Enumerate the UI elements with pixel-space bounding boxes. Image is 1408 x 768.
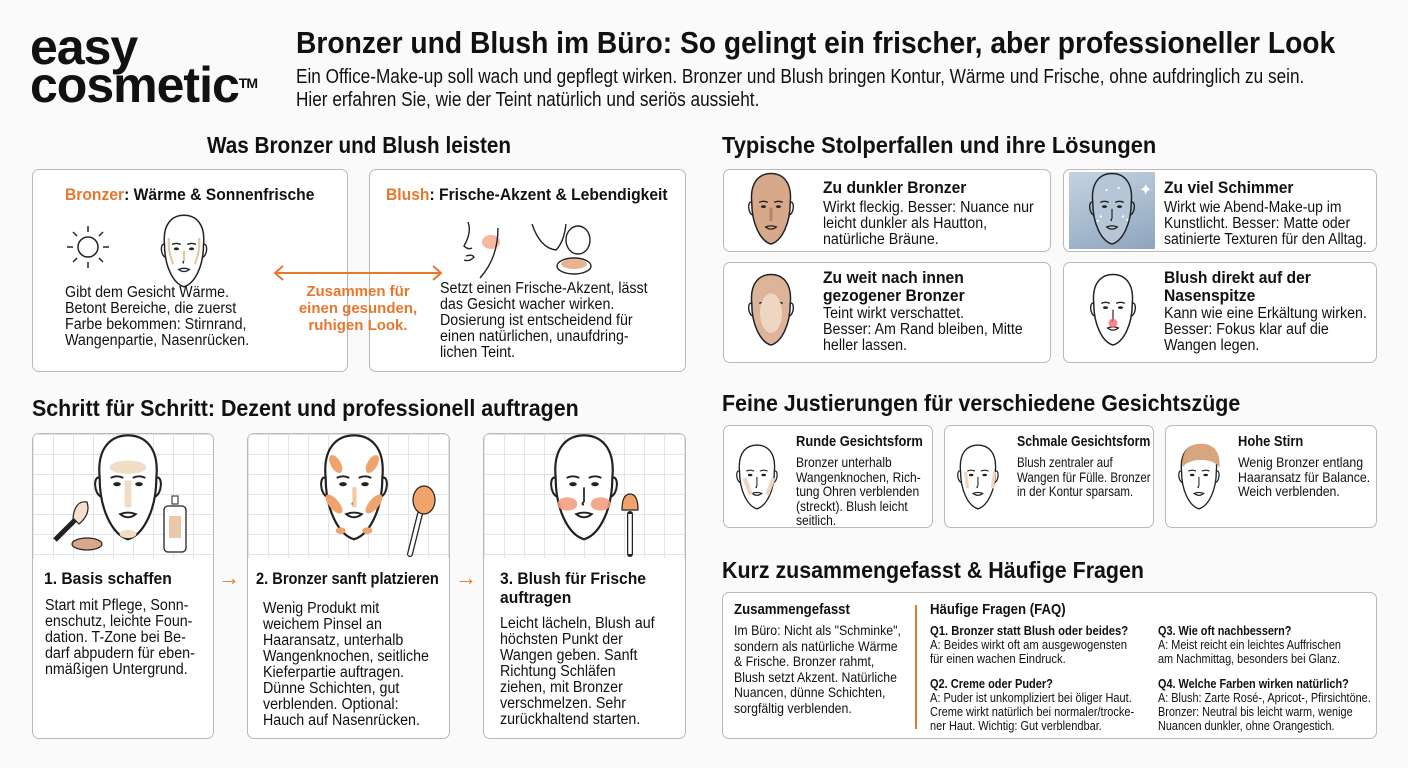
text: [823, 268, 1023, 354]
FAQ Q4: Nuancen dunkler, ohne Orangestich.: [1158, 719, 1335, 733]
step 2 text: [263, 600, 429, 729]
text: gezogener Bronzer: [823, 286, 965, 305]
text: Hohe Stirn: [1238, 433, 1303, 450]
card: zu viel Schimmer: [1063, 169, 1377, 252]
FAQ Q2: ner Haut. Wichtig: Gut verblendbar.: [930, 719, 1102, 733]
text: Zu weit nach innen: [823, 268, 964, 287]
text: satinierte Texturen für den Alltag.: [1164, 231, 1367, 248]
icon: shimmer face: [1069, 172, 1155, 249]
text: Besser: Fokus klar auf die: [1164, 321, 1329, 338]
step 2 heading: 2. Bronzer sanft platzieren: [256, 569, 439, 588]
icon: profile with blush: [463, 222, 500, 278]
step 1 illustration: [33, 434, 215, 558]
icon: red nose face: [1090, 274, 1136, 346]
callout: zusammen: ruhigen Look.: [308, 317, 408, 334]
logo: easy: [30, 19, 137, 75]
step 2 text: Kieferpartie auftragen.: [263, 664, 404, 681]
icon: sun: [67, 226, 109, 268]
bronzer text: Betont Bereiche, die zuerst: [65, 300, 236, 317]
step 3 text: verschmelzen. Sehr: [500, 695, 626, 712]
icon: round face: [736, 444, 778, 510]
summary: Zusammengefasst: [734, 601, 850, 618]
step 3 heading: 3. Blush für Frische: [500, 569, 646, 588]
text: Kunstlicht. Besser: Matte oder: [1164, 215, 1350, 232]
heading: Schritt für Schritt: Schritt für Schritt: Dezent und professionell auftragen: [32, 395, 579, 421]
text: Zu dunkler Bronzer: [823, 178, 966, 197]
heading: Stolperfallen: Typische Stolperfallen und ihre Lösungen: [722, 132, 1156, 158]
card: hohe Stirn: [1165, 425, 1377, 528]
step 3 text: [500, 615, 655, 728]
text: Blush zentraler auf: [1017, 454, 1113, 470]
logo: [30, 19, 258, 113]
text: Wangenknochen, Rich-: [796, 468, 921, 484]
step 3 text: höchsten Punkt der: [500, 631, 623, 648]
text: in der Kontur sparsam.: [1017, 483, 1133, 499]
blush text: lichen Teint.: [440, 344, 515, 361]
panel: blush: [369, 169, 686, 372]
summary: sorgfältig verblenden.: [734, 700, 852, 716]
step 3 text: zurückhaltend starten.: [500, 711, 640, 728]
FAQ Q1: [930, 624, 1128, 666]
step 3 text: Richtung Schläfen: [500, 663, 616, 680]
blush text: einen natürlichen, unaufdring-: [440, 328, 629, 345]
icon: compact: [531, 224, 592, 275]
blush text: Setzt einen Frische-Akzent, lässt: [440, 280, 648, 297]
step 2 text: verblenden. Optional:: [263, 696, 399, 713]
text: Nasenspitze: [1164, 286, 1255, 305]
icon: inward bronzer face: [748, 274, 794, 346]
FAQ Q4: Q4. Welche Farben wirken natürlich?: [1158, 677, 1349, 691]
FAQ Q2: Q2. Creme oder Puder?: [930, 677, 1053, 691]
step 1 text: dation. T-Zone bei Be-: [45, 629, 186, 646]
panel: summary and FAQ: [722, 592, 1377, 739]
text: seitlich.: [796, 512, 836, 528]
arrow: step 2 to 3: →: [455, 565, 477, 590]
bronzer text: [65, 284, 249, 349]
blush text: Dosierung ist entscheidend für: [440, 312, 633, 329]
step 1 text: [45, 597, 195, 678]
card: zu weit nach innen: [723, 262, 1051, 363]
subtitle: Ein Office-Make-up soll wach und gepflegt wirken. Bronzer und Blush bringen Kontur, Wärme und Frische, ohne aufdringlich zu sein.: [296, 66, 1304, 88]
text: Haaransatz für Balance.: [1238, 468, 1370, 484]
step 2 illustration: [248, 434, 451, 558]
text: Weich verblenden.: [1238, 483, 1340, 499]
step 1 text: nmäßigen Untergrund.: [45, 661, 188, 678]
text: [796, 433, 923, 528]
text: Kann wie eine Erkältung wirken.: [1164, 305, 1367, 322]
icon: high forehead face: [1178, 444, 1220, 510]
heading: Was Bronzer und Blush leisten: Was Bronzer und Blush leisten: [207, 132, 511, 158]
FAQ heading: Häufige Fragen (FAQ): [930, 601, 1066, 618]
arrow: step 1 to 2: →: [218, 565, 240, 590]
step 3 heading: auftragen: [500, 588, 571, 607]
text: natürliche Bräune.: [823, 231, 939, 248]
summary: sondern als natürliche Wärme: [734, 638, 898, 654]
summary: & Frische. Bronzer rahmt,: [734, 653, 874, 669]
icon: dark bronzer face: [748, 172, 794, 245]
text: tung Ohren verblenden: [796, 483, 919, 499]
text: leicht dunkler als Hautton,: [823, 215, 987, 232]
blush text: [440, 280, 648, 361]
summary: [734, 601, 901, 716]
icon: face with bronzer zones: [160, 214, 208, 288]
text: Wirkt wie Abend-Make-up im: [1164, 199, 1342, 216]
text: [1238, 433, 1370, 499]
step 3 text: Wangen geben. Sanft: [500, 647, 637, 664]
bronzer text: Wangenpartie, Nasenrücken.: [65, 332, 249, 349]
title: Bronzer und Blush im Büro: So gelingt ein frischer, aber professioneller Look: [296, 25, 1335, 60]
text: Schmale Gesichtsform: [1017, 433, 1150, 450]
FAQ Q2: A: Puder ist unkompliziert bei öliger Haut.: [930, 691, 1132, 705]
card: zu dunkler Bronzer: [723, 169, 1051, 252]
step 2 text: weichem Pinsel an: [263, 616, 382, 633]
FAQ Q1: Q1. Bronzer statt Blush oder beides?: [930, 624, 1128, 638]
FAQ Q4: [1158, 677, 1371, 733]
card: blush auf nasenspitze: [1063, 262, 1377, 363]
logo: cosmeticTM: [30, 57, 257, 113]
text: (streckt). Blush leicht: [796, 498, 908, 514]
summary: Im Büro: Nicht als "Schminke",: [734, 622, 901, 638]
panel: step 3: [483, 433, 686, 739]
subtitle: Hier erfahren Sie, wie der Teint natürlich und seriös aussieht.: [296, 89, 759, 111]
text: [1017, 433, 1151, 499]
card: runde Gesichtsform: [723, 425, 933, 528]
step 3 text: Leicht lächeln, Blush auf: [500, 615, 655, 632]
text: [1164, 268, 1367, 354]
text: [1164, 178, 1367, 248]
arrow: double arrow between panels: [274, 265, 442, 281]
step 1 text: darf abpudern für eben-: [45, 645, 195, 662]
step 2 text: Wenig Produkt mit: [263, 600, 379, 617]
text: heller lassen.: [823, 337, 907, 354]
step 3 heading: [500, 569, 646, 607]
text: Zu viel Schimmer: [1164, 178, 1294, 197]
FAQ Q3: [1158, 624, 1341, 666]
bronzer text: Farbe bekommen: Stirnrand,: [65, 316, 247, 333]
text: Wangen legen.: [1164, 337, 1259, 354]
FAQ Q4: A: Blush: Zarte Rosé-, Apricot-, Pfirsichtöne.: [1158, 691, 1371, 705]
panel: step 1: [32, 433, 214, 739]
callout: zusammen: [299, 283, 417, 334]
icon: shimmer face: ✦: [1139, 182, 1152, 199]
summary: Nuancen, dünne Schichten,: [734, 684, 885, 700]
blush text: das Gesicht wacher wirken.: [440, 296, 614, 313]
summary: Blush setzt Akzent. Natürliche: [734, 668, 897, 684]
blush heading: Blush: Frische-Akzent & Lebendigkeit: [386, 185, 668, 204]
FAQ Q1: für einen wachen Eindruck.: [930, 652, 1066, 666]
text: Wenig Bronzer entlang: [1238, 454, 1363, 470]
FAQ Q1: A: Beides wirkt oft am ausgewogensten: [930, 638, 1127, 652]
text: Blush direkt auf der: [1164, 268, 1311, 287]
FAQ Q2: Creme wirkt natürlich bei normaler/trocke-: [930, 705, 1134, 719]
divider: [915, 605, 917, 729]
step 1 text: Start mit Pflege, Sonn-: [45, 597, 188, 614]
callout: zusammen: Zusammen für: [306, 283, 410, 300]
FAQ Q3: am Nachmittag, besonders bei Glanz.: [1158, 652, 1340, 666]
panel: step 2: [247, 433, 450, 739]
step 2 text: Dünne Schichten, gut: [263, 680, 399, 697]
FAQ Q4: Bronzer: Neutral bis leicht warm, wenige: [1158, 705, 1353, 719]
step 3 illustration: [484, 434, 687, 558]
FAQ Q2: [930, 677, 1134, 733]
text: Teint wirkt verschattet.: [823, 305, 964, 322]
step 2 text: Haaransatz, unterhalb: [263, 632, 403, 649]
panel: bronzer: [32, 169, 348, 372]
heading: Feine Justierungen: Feine Justierungen für verschiedene Gesichtszüge: [722, 390, 1240, 416]
text: Wirkt fleckig. Besser: Nuance nur: [823, 199, 1034, 216]
text: Wangen für Fülle. Bronzer: [1017, 468, 1151, 484]
card: schmale Gesichtsform: [944, 425, 1154, 528]
subtitle: [296, 66, 1304, 111]
callout: zusammen: einen gesunden,: [299, 300, 417, 317]
step 3 text: ziehen, mit Bronzer: [500, 679, 623, 696]
icon: narrow face: [957, 444, 999, 510]
text: Runde Gesichtsform: [796, 433, 923, 450]
step 2 text: Wangenknochen, seitliche: [263, 648, 429, 665]
heading: Kurz zusammengefasst: Kurz zusammengefasst & Häufige Fragen: [722, 557, 1144, 583]
text: Besser: Am Rand bleiben, Mitte: [823, 321, 1023, 338]
bronzer text: Gibt dem Gesicht Wärme.: [65, 284, 229, 301]
bronzer heading: Bronzer: Wärme & Sonnenfrische: [65, 185, 314, 204]
FAQ Q3: A: Meist reicht ein leichtes Auffrischen: [1158, 638, 1341, 652]
step 1 heading: 1. Basis schaffen: [44, 569, 172, 588]
FAQ Q3: Q3. Wie oft nachbessern?: [1158, 624, 1291, 638]
text: Bronzer unterhalb: [796, 454, 892, 470]
step 1 text: enschutz, leichte Foun-: [45, 613, 192, 630]
step 2 text: Hauch auf Nasenrücken.: [263, 712, 420, 729]
text: [823, 178, 1034, 248]
